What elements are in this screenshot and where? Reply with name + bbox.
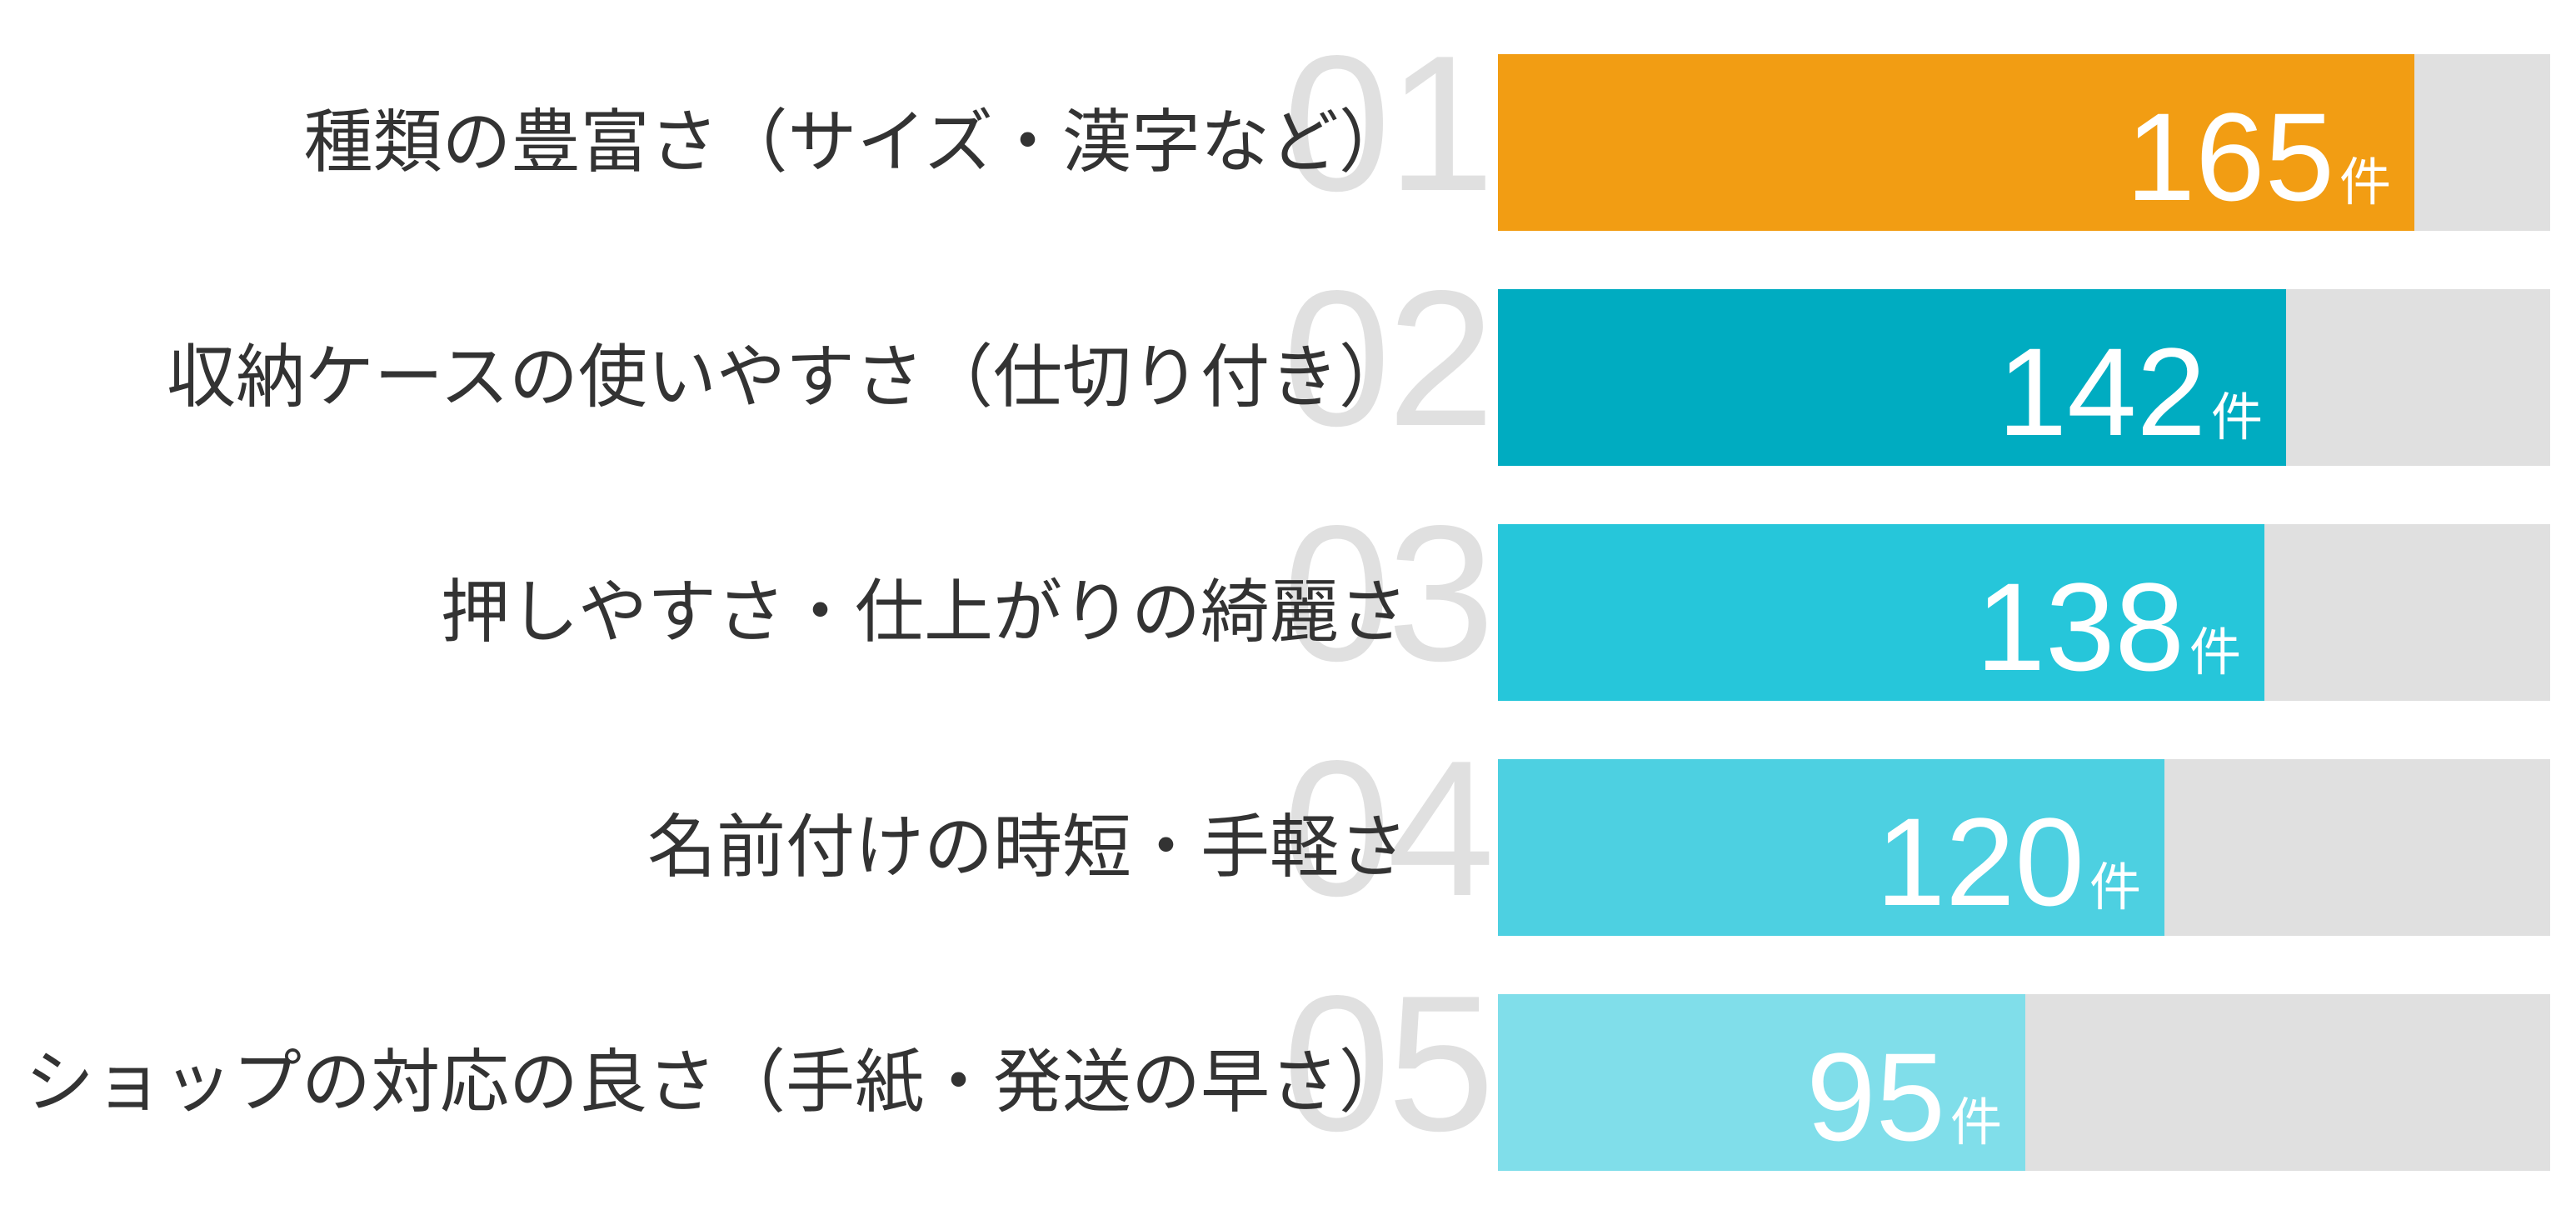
row 4	[647, 721, 2550, 937]
bar 1: 165件	[2126, 87, 2391, 227]
rank number 04: 04	[1283, 721, 1491, 937]
bar 2: 142件	[1998, 322, 2263, 462]
rank number 01: 01	[1283, 16, 1491, 232]
row 5	[25, 956, 2550, 1172]
label 1: 種類の豊富さ（サイズ・漢字など）	[303, 103, 1408, 181]
row 1	[303, 16, 2550, 232]
row 2	[167, 251, 2550, 467]
bar 3: 138件	[1976, 557, 2241, 697]
row 3	[441, 486, 2550, 702]
bar 5: 95件	[1806, 1027, 2002, 1167]
bar 4: 120件	[1876, 792, 2141, 932]
rank number 05: 05	[1283, 956, 1491, 1172]
bar 1	[1498, 54, 2550, 231]
label 3: 押しやすさ・仕上がりの綺麗さ	[441, 573, 1408, 651]
rank number 02: 02	[1283, 251, 1491, 467]
rank number 03: 03	[1283, 486, 1491, 702]
label 2: 収納ケースの使いやすさ（仕切り付き）	[167, 338, 1408, 416]
bar 2	[1498, 289, 2550, 466]
label 4: 名前付けの時短・手軽さ	[647, 808, 1408, 886]
bar 3	[1498, 524, 2550, 701]
label 5: ショップの対応の良さ（手紙・発送の早さ）	[25, 1043, 1408, 1121]
bar 5	[1498, 994, 2550, 1171]
bar 4	[1498, 759, 2550, 936]
